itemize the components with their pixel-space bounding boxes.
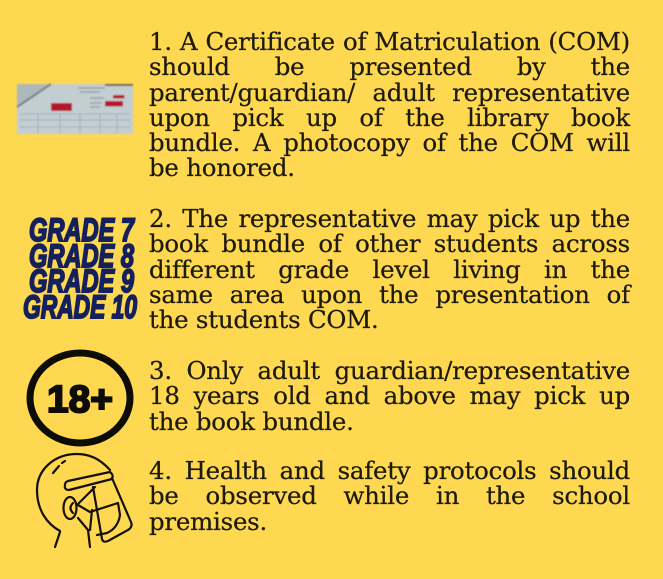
text: rule 1: parent/guardian/ adult representative [149,78,630,106]
text: rule 2: the students COM. [149,305,379,334]
text: rule 1 [149,27,630,182]
text: rule 2: different grade level living in the [149,254,630,284]
icon: grade levels 7 to 10: GRADE 8 [29,238,134,274]
text: rule 4: 4. Health and safety protocols should [149,456,630,485]
icon: 18+ age badge: 18+ [47,379,113,421]
text: rule 3: the book bundle. [149,406,354,436]
text: rule 2: 2. The representative may pick up the [149,204,630,233]
icon: grade levels 7 to 10: GRADE 7 [29,212,136,248]
icon: grade levels 7 to 10: GRADE 10 [23,289,137,325]
icon: grade levels 7 to 10: GRADE 9 [29,263,134,299]
text: rule 3 [149,356,630,436]
text: rule 1: upon pick up of the library book [149,103,630,132]
text: rule 4: be observed while in the school [149,481,630,510]
text: rule 2: book bundle of other students across [149,229,630,258]
text: rule 4: premises. [149,506,267,536]
text: rule 1: be honored. [149,153,295,182]
text: rule 1: 1. A Certificate of Matriculation (COM) [149,27,630,56]
text: rule 3: 18 years old and above may pick up [149,381,630,410]
text: rule 2: same area upon the presentation of [149,280,630,309]
text: rule 1: bundle. A photocopy of the COM will [149,128,630,157]
text: rule 4 [149,456,630,536]
text: rule 2 [149,204,632,334]
text: rule 3: 3. Only adult guardian/representative [149,356,630,385]
text: rule 1: should be presented by the [149,52,630,81]
